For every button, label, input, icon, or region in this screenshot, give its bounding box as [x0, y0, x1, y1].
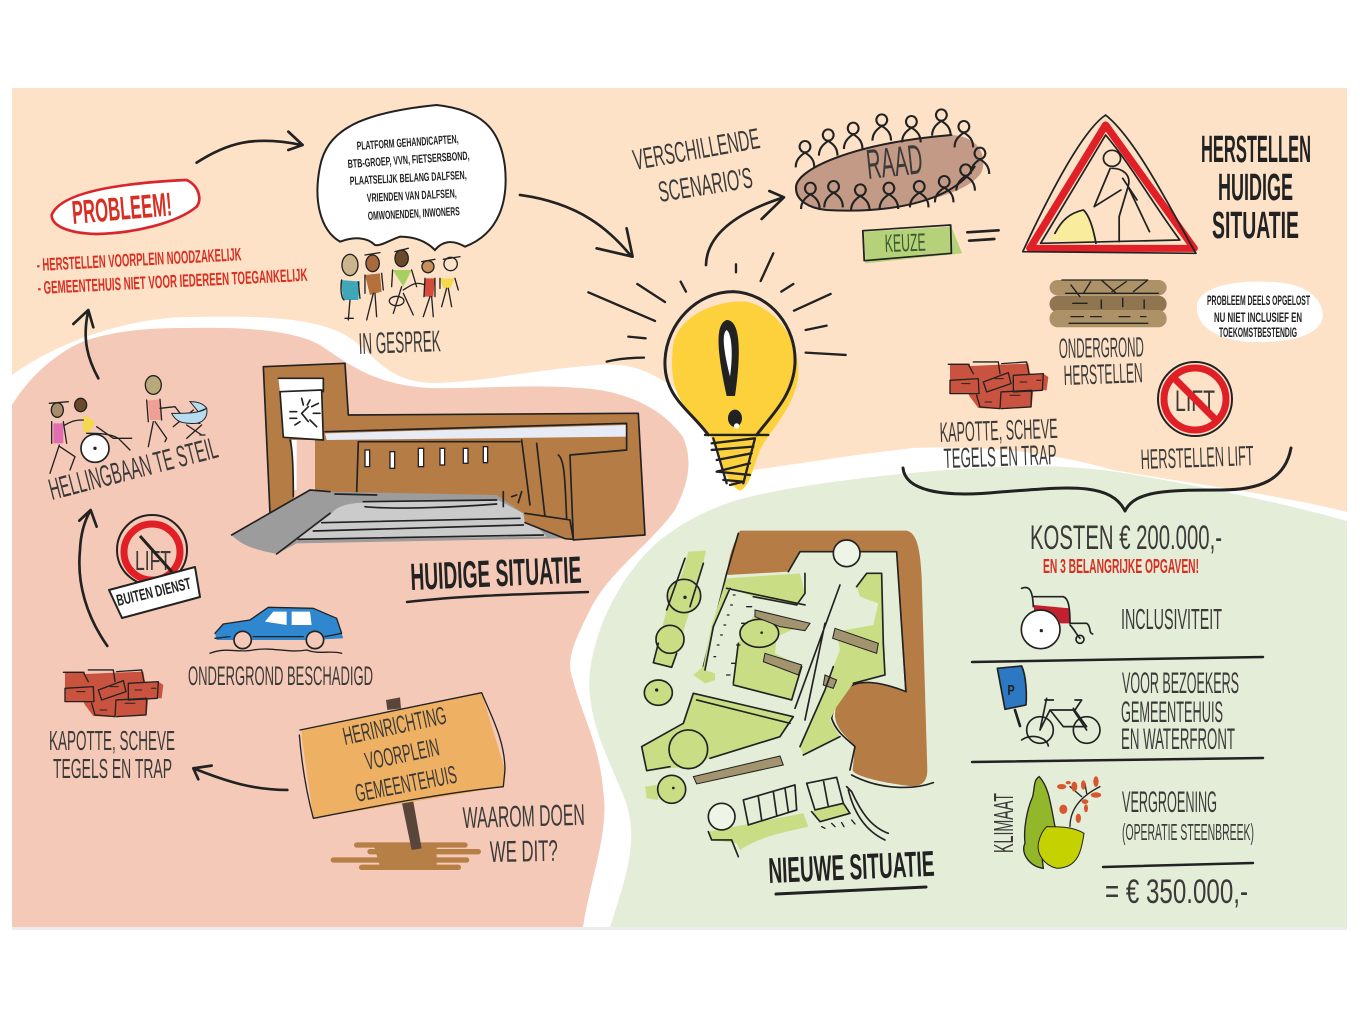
icon: trees and branch — [1024, 776, 1101, 868]
icon: ground layers — [1050, 280, 1167, 327]
arrow: to ramp — [79, 510, 107, 646]
text: problem line 2: - GEMEENTEHUIS NIET VOOR IEDEREEN TOEGANKELIJK — [37, 265, 308, 298]
heading: huidige situatie: HUIDIGE SITUATIE — [410, 550, 582, 599]
label: kapotte tegels — [49, 725, 175, 784]
icon: parking and bicycle: P — [1007, 683, 1015, 699]
text: subtitle opgaven: EN 3 BELANGRIJKE OPGAVEN! — [1043, 556, 1199, 578]
icon: parking and bicycle — [997, 666, 1100, 746]
icon: lift out of order — [109, 515, 200, 618]
text: speech bubble participants: PLATFORM GEHANDICAPTEN, — [356, 132, 459, 153]
icon: wheelchair — [1021, 587, 1093, 649]
text: sign: VOORPLEIN — [363, 733, 442, 776]
arrow: to council — [706, 191, 784, 265]
text: speech bubble participants: OMWONENDEN, INWONERS — [367, 204, 460, 223]
illustration: town hall building — [232, 363, 645, 554]
icon: lift forbidden — [1158, 362, 1232, 436]
underline — [407, 592, 588, 602]
text: verschillende scenario's: VERSCHILLENDE — [631, 123, 762, 177]
heading: probleem: PROBLEEM! — [70, 185, 173, 231]
icon: group of people — [341, 248, 460, 320]
group: scenarios and lightbulb — [520, 123, 846, 491]
group: council decision and restore: KAPOTTE, SCHEVE — [939, 413, 1058, 448]
text: waarom doen we dit: WE DIT? — [490, 835, 558, 869]
label: kapotte tegels: TEGELS EN TRAP — [53, 753, 172, 784]
icon: lift forbidden: LIFT — [1175, 385, 1215, 418]
text: voor bezoekers — [1121, 667, 1239, 756]
illustration: site plan — [642, 531, 933, 857]
bottom edge shadow — [12, 927, 1347, 930]
label: klimaat: KLIMAAT — [988, 793, 1019, 853]
group: council decision and restore: HERSTELLEN — [1063, 357, 1143, 391]
white band between regions — [12, 317, 1347, 927]
label: ondergrond herstellen — [1059, 332, 1144, 391]
arrow: to problem — [73, 310, 98, 378]
group: problem and conversation: IN GESPREK — [358, 325, 441, 361]
text: sign: HERINRICHTING — [340, 702, 449, 751]
icon: broken bricks — [948, 362, 1048, 409]
callout: problem partly solved — [1197, 282, 1323, 342]
icon: problem badge — [52, 180, 199, 234]
group: problem and conversation — [36, 105, 506, 361]
arrow: sign to tiles — [193, 766, 287, 790]
group: current situation: KAPOTTE, SCHEVE — [49, 725, 175, 756]
text: sign — [340, 702, 459, 808]
group: new situation — [642, 519, 1263, 911]
text: waarom doen we dit: WAAROM DOEN — [462, 799, 585, 835]
icon: road works sign — [1023, 115, 1196, 253]
icon: lightbulb — [588, 253, 846, 491]
text: total: = € 350.000,- — [1105, 873, 1248, 911]
divider — [972, 758, 1263, 762]
text: verschillende scenario's: SCENARIO'S — [656, 162, 755, 209]
group: council decision and restore: KEUZE — [884, 229, 926, 258]
group: new situation: INCLUSIVITEIT — [1121, 604, 1222, 636]
heading: herstellen huidige situatie — [1201, 129, 1311, 247]
divider — [1103, 863, 1253, 867]
group: council decision and restore: TEGELS EN TRAP — [943, 439, 1057, 474]
label: kapotte tegels — [939, 413, 1058, 474]
underline — [776, 887, 926, 894]
text: waarom doen we dit — [462, 799, 585, 869]
icon: blue car — [210, 607, 343, 653]
label: raad: RAAD — [864, 135, 925, 188]
text: vergroening — [1122, 786, 1254, 845]
group: new situation: GEMEENTEHUIS — [1121, 696, 1223, 729]
label: hellingbaan te steil: HELLINGBAAN TE STEIL — [46, 432, 221, 507]
brace: combined costs — [903, 448, 1291, 511]
speech bubble — [317, 105, 506, 250]
group: council decision and restore — [796, 109, 1323, 511]
group: council decision and restore: ONDERGROND — [1059, 332, 1144, 364]
text: kosten: KOSTEN € 200.000,- — [1030, 519, 1222, 557]
text: speech bubble participants: VRIENDEN VAN DALFSEN, — [366, 186, 457, 205]
text: problem line 1: - HERSTELLEN VOORPLEIN NOODZAKELIJK — [36, 244, 242, 275]
icon: lift out of order: BUITEN DIENST — [115, 576, 193, 610]
text: speech bubble participants: PLAATSELIJK BELANG DALFSEN, — [349, 168, 467, 188]
text: sign: GEMEENTEHUIS — [353, 761, 459, 808]
group: current situation — [46, 310, 645, 869]
heading: nieuwe situatie: NIEUWE SITUATIE — [768, 843, 935, 891]
box: keuze — [863, 225, 998, 263]
group: current situation: ONDERGROND BESCHADIGD — [188, 661, 373, 691]
divider — [972, 657, 1263, 662]
panel: green region, new situation — [589, 466, 1347, 927]
icon: council table — [796, 109, 989, 211]
text: vergroening: VERGROENING — [1122, 786, 1217, 819]
illustration: signpost — [299, 693, 505, 867]
icon: lift out of order: LIFT — [135, 545, 171, 576]
icon: broken bricks — [63, 670, 163, 717]
text: speech bubble participants — [347, 132, 470, 223]
text: verschillende scenario's — [631, 123, 762, 209]
text: speech bubble participants: BTB-GROEP, VVN, FIETSERSBOND, — [347, 149, 470, 171]
arrow: into lightbulb — [520, 195, 633, 257]
panel: pink region, current situation — [12, 328, 688, 927]
icon: people on ramp — [49, 376, 207, 473]
arrow: to conversation — [197, 132, 303, 163]
